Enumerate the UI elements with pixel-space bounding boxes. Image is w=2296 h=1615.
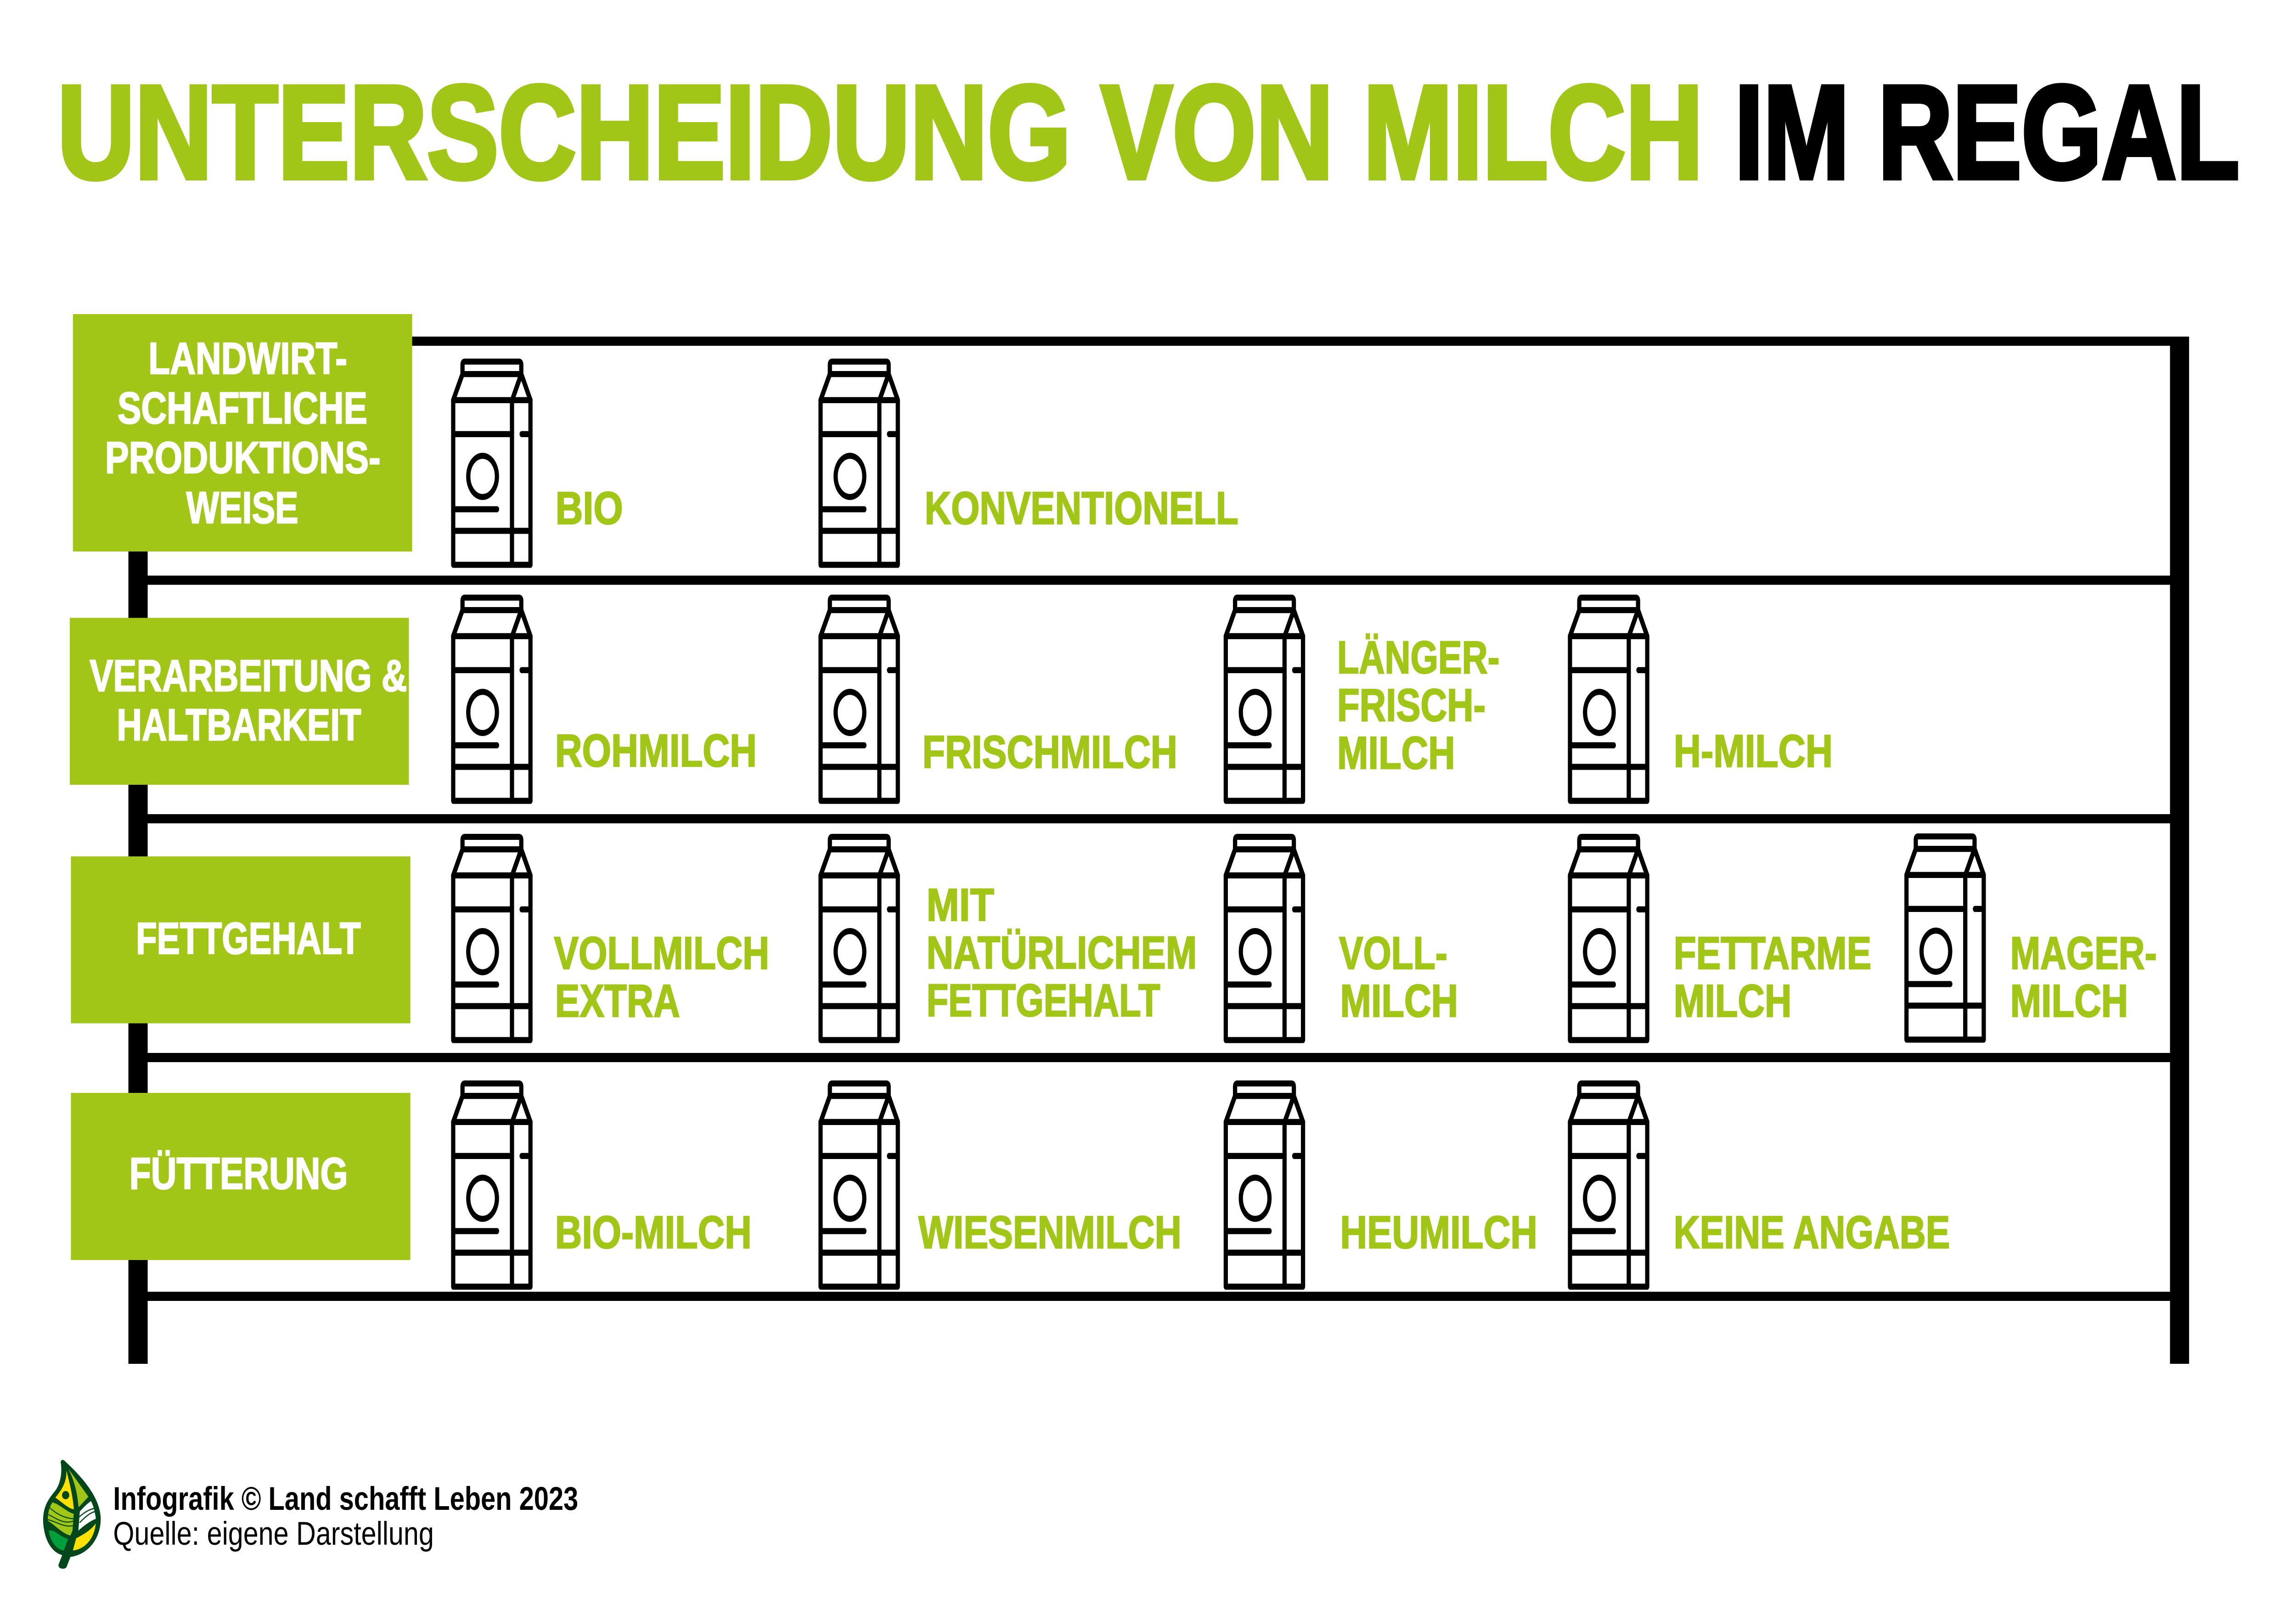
icon: milk carton xyxy=(1226,597,1303,801)
icon: milk carton xyxy=(453,361,530,565)
shelf frame xyxy=(129,337,2189,1364)
label: Länger-Frisch-Milch: FRISCH- xyxy=(1337,680,1486,731)
label: Vollmilch: VOLL- xyxy=(1339,928,1447,979)
label: fettarme Milch xyxy=(1674,928,1871,1027)
label: mit natürlichem Fettgehalt xyxy=(927,880,1197,1026)
label: Wiesenmilch: WIESENMILCH xyxy=(918,1207,1182,1258)
icon: milk carton xyxy=(821,1083,898,1287)
title: IM REGAL xyxy=(1735,57,2240,207)
label: mit natürlichem Fettgehalt: FETTGEHALT xyxy=(927,975,1160,1026)
label: Länger-Frisch-Milch: LÄNGER- xyxy=(1337,632,1500,683)
category label: Landwirtschaftliche Produktionsweise: WEISE xyxy=(186,483,298,533)
icon: milk carton xyxy=(821,361,898,565)
icon: milk carton xyxy=(821,837,898,1040)
category label: Landwirtschaftliche Produktionsweise: PRODUKTIONS- xyxy=(105,433,381,483)
icon: milk carton xyxy=(1570,597,1647,801)
row: Fütterung xyxy=(71,1083,1950,1287)
label: Länger-Frisch-Milch: MILCH xyxy=(1337,728,1455,779)
label: Magermilch xyxy=(2010,928,2157,1027)
icon: milk carton xyxy=(1907,836,1984,1040)
label: Vollmilch extra: EXTRA xyxy=(555,976,680,1027)
icon: milk carton xyxy=(821,597,898,801)
label: H-Milch: H-MILCH xyxy=(1674,726,1833,777)
label: Länger-Frisch-Milch xyxy=(1337,632,1500,779)
category label: Fütterung xyxy=(71,1093,411,1260)
label: Bio: BIO xyxy=(556,483,623,534)
label: mit natürlichem Fettgehalt: MIT xyxy=(927,880,994,931)
icon: milk carton xyxy=(453,837,530,1040)
category label: Fütterung: FÜTTERUNG xyxy=(129,1148,348,1199)
label: Vollmilch extra: VOLLMILCH xyxy=(554,928,769,979)
icon: milk carton xyxy=(453,1083,530,1287)
icon: milk carton xyxy=(453,597,530,801)
label: Heumilch: HEUMILCH xyxy=(1340,1207,1537,1258)
label: Konventionell: KONVENTIONELL xyxy=(925,483,1238,534)
title: UNTERSCHEIDUNG VON MILCH xyxy=(57,57,1703,207)
label: fettarme Milch: MILCH xyxy=(1674,976,1792,1027)
row: Fettgehalt xyxy=(71,836,2157,1040)
label: Magermilch: MAGER- xyxy=(2010,928,2157,979)
category label: Verarbeitung und Haltbarkeit: VERARBEITUNG & xyxy=(90,651,407,701)
label: Rohmilch: ROHMILCH xyxy=(555,726,757,777)
label: Vollmilch extra xyxy=(554,928,769,1027)
label: mit natürlichem Fettgehalt: NATÜRLICHEM xyxy=(927,928,1197,979)
footer credit: Infografik © Land schafft Leben 2023 xyxy=(113,1480,578,1517)
footer source: Quelle: eigene Darstellung xyxy=(113,1515,434,1552)
icon: milk carton xyxy=(1570,837,1647,1040)
category label: Fettgehalt xyxy=(71,856,411,1023)
category label: Landwirtschaftliche Produktionsweise xyxy=(73,314,412,551)
label: Magermilch: MILCH xyxy=(2010,976,2128,1027)
label: keine Angabe: KEINE ANGABE xyxy=(1674,1207,1950,1258)
category label: Verarbeitung und Haltbarkeit xyxy=(70,618,409,785)
icon: Land schafft Leben leaf logo xyxy=(43,1460,101,1569)
row: landwirtschaftliche Produktionsweise xyxy=(73,314,1238,565)
icon: milk carton xyxy=(1226,837,1303,1040)
label: Frischmilch: FRISCHMILCH xyxy=(923,727,1177,778)
category label: Verarbeitung und Haltbarkeit: HALTBARKEIT xyxy=(117,700,361,750)
label: Bio-Milch: BIO-MILCH xyxy=(555,1207,752,1258)
row: Verarbeitung und Haltbarkeit xyxy=(70,597,1833,801)
icon: milk carton xyxy=(1570,1083,1647,1287)
category label: Fettgehalt: FETTGEHALT xyxy=(136,913,361,963)
icon: milk carton xyxy=(1226,1083,1303,1287)
category label: Landwirtschaftliche Produktionsweise: SCHAFTLICHE xyxy=(118,383,367,433)
label: Vollmilch: MILCH xyxy=(1340,976,1458,1027)
label: fettarme Milch: FETTARME xyxy=(1674,928,1871,979)
label: Vollmilch xyxy=(1339,928,1458,1027)
category label: Landwirtschaftliche Produktionsweise: LANDWIRT- xyxy=(148,333,347,383)
